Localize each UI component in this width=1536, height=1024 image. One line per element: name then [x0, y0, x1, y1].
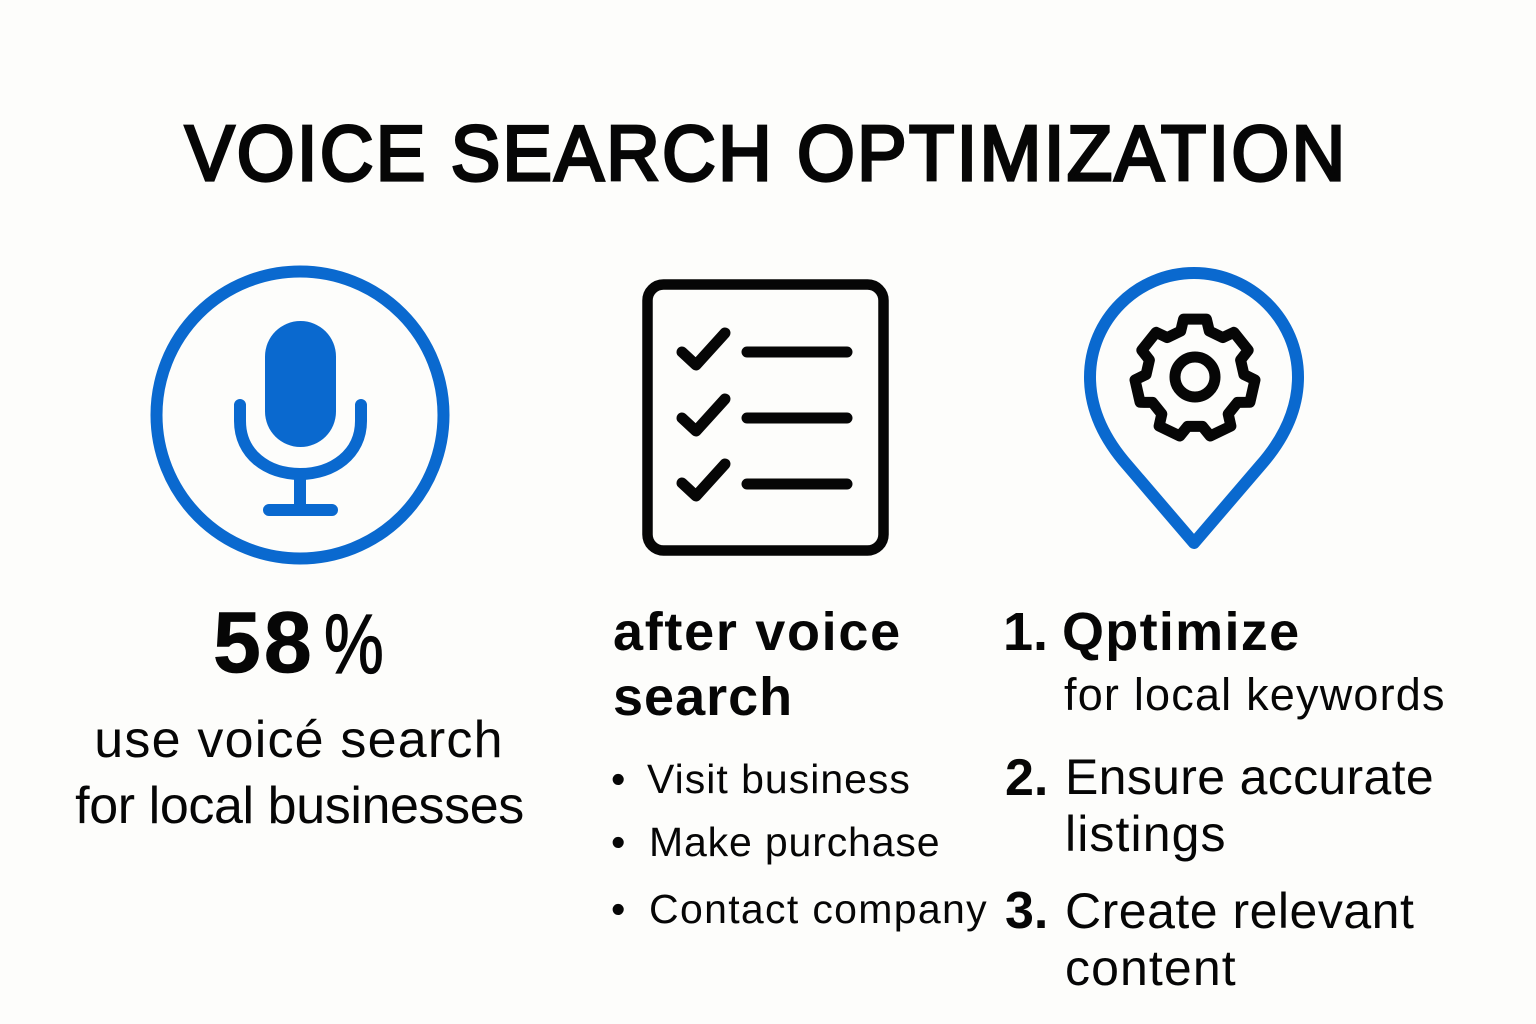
bullet list: actions: • — [611, 756, 625, 802]
bullet list: actions: Visit business — [647, 756, 911, 802]
heading: after voice search: search — [613, 667, 793, 727]
bullet list: actions: • — [611, 819, 625, 865]
numbered list: steps: 1. — [1003, 602, 1048, 662]
bullet list: actions: • — [611, 886, 625, 932]
icon: location pin with gear — [1084, 267, 1304, 549]
numbered list: steps: 2. — [1005, 749, 1048, 807]
bullet list: actions: Make purchase — [649, 819, 940, 865]
text: use voice search for local businesses: use voicé search — [94, 711, 504, 769]
bullet list: actions: Contact company — [649, 886, 988, 932]
title: VOICE SEARCH OPTIMIZATION — [185, 109, 1348, 197]
text: use voice search for local businesses — [75, 711, 524, 835]
heading: after voice search: after voice — [613, 602, 902, 662]
statistic: 58% — [213, 595, 384, 691]
text: use voice search for local businesses: for local businesses — [75, 777, 524, 835]
statistic: 58%: 58 — [213, 595, 315, 691]
numbered list: steps: Ensure accurate — [1065, 749, 1434, 805]
numbered list: steps: 3. — [1005, 882, 1048, 940]
bullet list: actions — [611, 756, 988, 932]
numbered list: steps: Qptimize — [1062, 602, 1300, 662]
statistic: 58%: % — [324, 597, 384, 691]
heading: after voice search — [613, 602, 902, 727]
numbered list: steps: Create relevant — [1065, 883, 1414, 939]
numbered list: steps: for local keywords — [1064, 669, 1446, 720]
icon: microphone in circle — [150, 266, 450, 564]
numbered list: steps — [1003, 602, 1446, 996]
icon: checklist — [642, 279, 889, 556]
numbered list: steps: content — [1065, 940, 1237, 996]
numbered list: steps: listings — [1065, 806, 1227, 862]
